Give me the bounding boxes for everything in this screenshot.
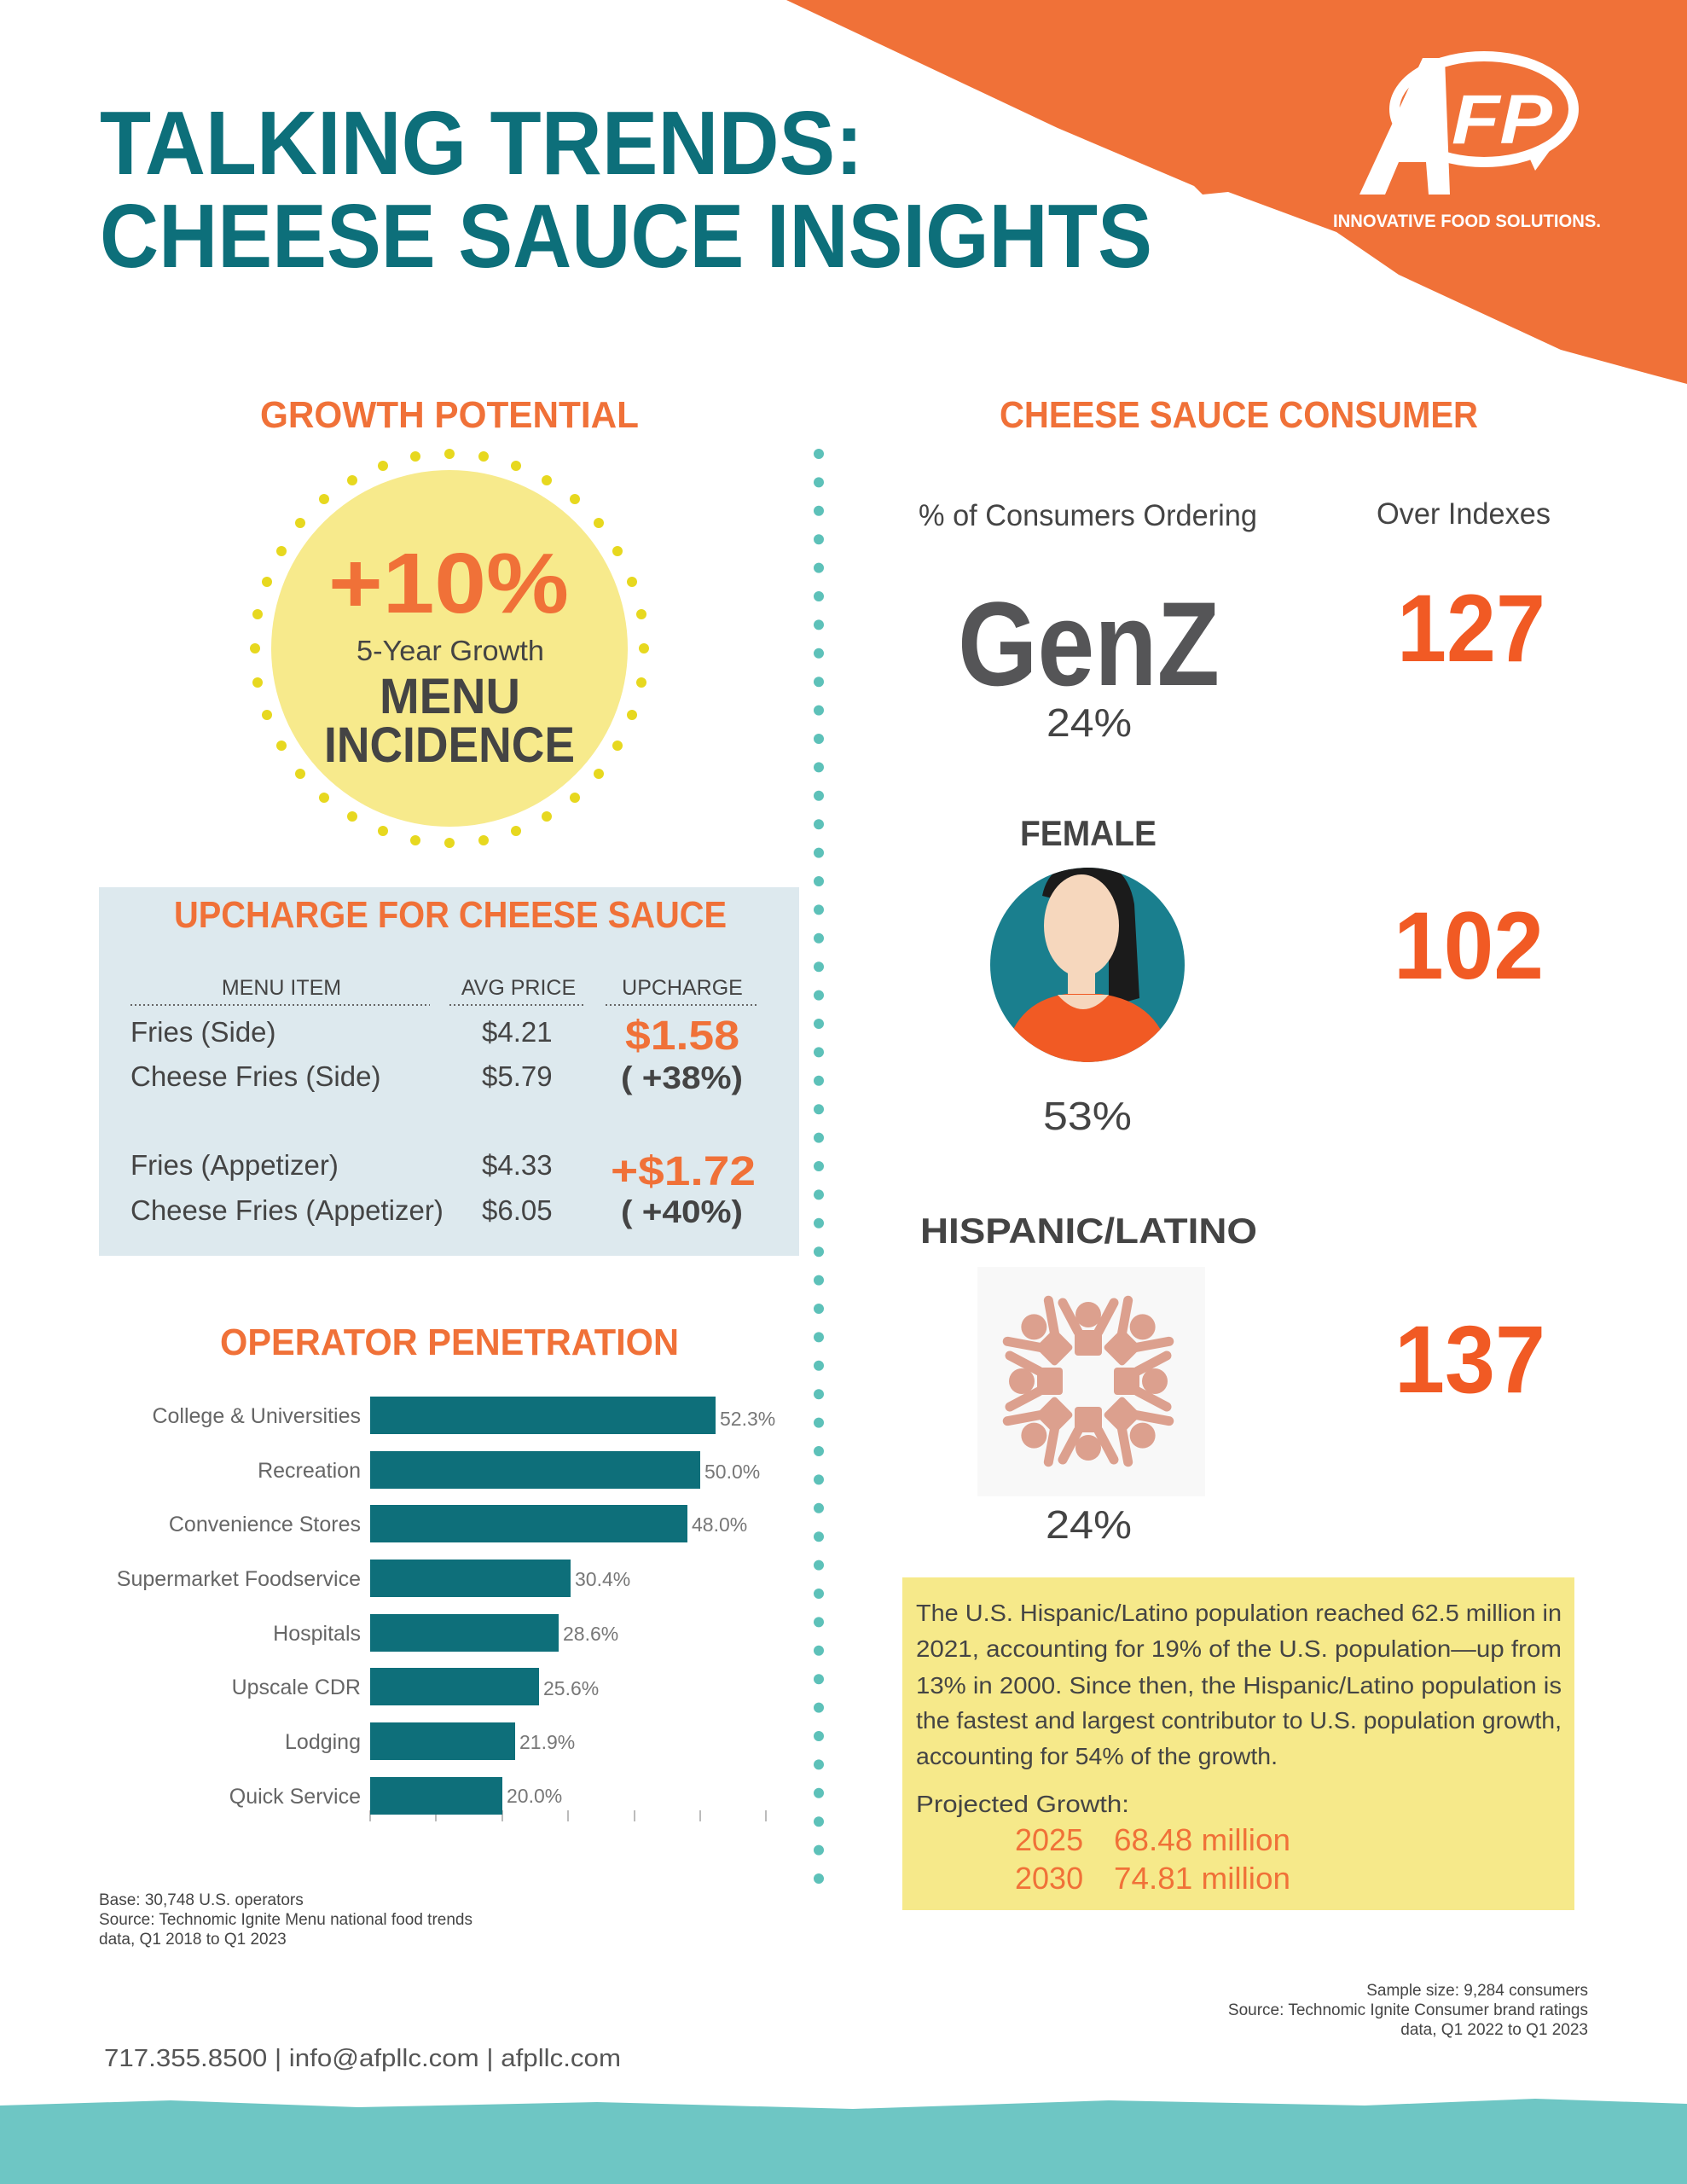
icon: woman bbox=[990, 860, 1185, 1075]
growth badge bbox=[250, 449, 649, 848]
female stat bbox=[990, 813, 1185, 1138]
footnote: consumer source: data, Q1 2022 to Q1 2023 bbox=[1400, 2021, 1588, 2039]
callout: hispanic population: 2021, accounting for 19% of the U.S. population—up from bbox=[916, 1635, 1562, 1662]
callout: hispanic population: 74.81 million bbox=[1114, 1861, 1290, 1896]
GenZ stat: GenZ bbox=[958, 577, 1220, 711]
footnote: operator source: data, Q1 2018 to Q1 2023 bbox=[99, 1931, 287, 1949]
panel: upcharge for cheese sauce: ( +40%) bbox=[621, 1194, 743, 1229]
dotted divider bbox=[814, 454, 824, 1907]
column headers: Over Indexes bbox=[1377, 497, 1551, 531]
callout: hispanic population: Projected Growth: bbox=[916, 1791, 1129, 1817]
index: 127: 127 bbox=[1397, 575, 1545, 682]
callout: hispanic population: the fastest and largest contributor to U.S. population growth, bbox=[916, 1707, 1562, 1734]
female stat: 53% bbox=[1043, 1094, 1132, 1138]
heading: operator penetration: OPERATOR PENETRATION bbox=[220, 1321, 679, 1363]
bar chart: operator penetration: 25.6% bbox=[543, 1677, 599, 1699]
panel: upcharge for cheese sauce: $6.05 bbox=[482, 1194, 553, 1226]
teal footer band bbox=[0, 2099, 1687, 2184]
bar chart: operator penetration: 28.6% bbox=[563, 1623, 618, 1645]
panel: upcharge for cheese sauce: Cheese Fries (Side) bbox=[130, 1060, 380, 1092]
heading: cheese sauce consumer: CHEESE SAUCE CONSUMER bbox=[1000, 394, 1478, 436]
panel: upcharge for cheese sauce: Fries (Side) bbox=[130, 1016, 276, 1048]
hispanic/latino stat bbox=[920, 1211, 1257, 1547]
callout: hispanic population bbox=[902, 1577, 1574, 1910]
footer contacts: 717.355.8500 | info@afpllc.com | afpllc.com bbox=[104, 2045, 621, 2072]
bar chart: operator penetration: Convenience Stores bbox=[169, 1513, 361, 1536]
panel: upcharge for cheese sauce: UPCHARGE FOR CHEESE SAUCE bbox=[174, 894, 727, 936]
index: 137: 137 bbox=[1394, 1306, 1545, 1413]
bar chart: operator penetration: 50.0% bbox=[704, 1461, 760, 1483]
callout: hispanic population: The U.S. Hispanic/Latino population reached 62.5 million in bbox=[916, 1600, 1562, 1626]
panel: upcharge for cheese sauce: $1.58 bbox=[625, 1014, 739, 1059]
hispanic/latino stat: 24% bbox=[1046, 1502, 1132, 1547]
growth badge: 5-Year Growth bbox=[357, 635, 544, 666]
GenZ stat: 24% bbox=[1046, 700, 1132, 745]
footnote: operator source: Source: Technomic Ignite Menu national food trends bbox=[99, 1911, 472, 1929]
panel: upcharge for cheese sauce: UPCHARGE bbox=[622, 976, 743, 1000]
column headers bbox=[919, 497, 1551, 532]
callout: hispanic population: 2025 bbox=[1015, 1822, 1083, 1857]
female stat: FEMALE bbox=[1020, 813, 1157, 853]
callout: hispanic population: 13% in 2000. Since then, the Hispanic/Latino population is bbox=[916, 1672, 1562, 1699]
bar chart: operator penetration: 21.9% bbox=[519, 1731, 575, 1753]
panel: upcharge for cheese sauce: +$1.72 bbox=[611, 1149, 756, 1194]
title bbox=[100, 93, 1152, 287]
bar chart: operator penetration: Lodging bbox=[285, 1730, 361, 1754]
footnote: operator source bbox=[99, 1891, 472, 1949]
panel: upcharge for cheese sauce: Cheese Fries (Appetizer) bbox=[130, 1194, 443, 1226]
bar chart: operator penetration: 20.0% bbox=[507, 1785, 562, 1807]
logo: AFP: FP bbox=[1452, 81, 1552, 159]
panel: upcharge for cheese sauce: AVG PRICE bbox=[461, 976, 576, 1000]
panel: upcharge for cheese sauce: ( +38%) bbox=[621, 1060, 743, 1095]
growth badge: MENU bbox=[380, 669, 520, 724]
footnote: operator source: Base: 30,748 U.S. operators bbox=[99, 1891, 304, 1909]
bar chart: operator penetration bbox=[117, 1397, 775, 1821]
heading: growth potential: GROWTH POTENTIAL bbox=[260, 394, 639, 436]
callout: hispanic population: accounting for 54% of the growth. bbox=[916, 1743, 1278, 1769]
bar chart: operator penetration: Quick Service bbox=[229, 1785, 361, 1809]
hispanic/latino stat: HISPANIC/LATINO bbox=[920, 1211, 1257, 1251]
growth badge: INCIDENCE bbox=[324, 717, 575, 773]
footnote: consumer source: Sample size: 9,284 consumers bbox=[1366, 1982, 1588, 2000]
icon: people circle bbox=[977, 1267, 1205, 1496]
logo tagline: INNOVATIVE FOOD SOLUTIONS. bbox=[1333, 212, 1601, 231]
footnote: consumer source bbox=[1228, 1982, 1588, 2039]
callout: hispanic population: 68.48 million bbox=[1114, 1822, 1290, 1857]
panel: upcharge for cheese sauce: $4.33 bbox=[482, 1149, 553, 1181]
title: CHEESE SAUCE INSIGHTS bbox=[100, 186, 1152, 287]
column headers: % of Consumers Ordering bbox=[919, 499, 1257, 532]
bar chart: operator penetration: 52.3% bbox=[720, 1408, 775, 1430]
bar chart: operator penetration: Recreation bbox=[258, 1459, 361, 1483]
bar chart: operator penetration: Supermarket Foodservice bbox=[117, 1567, 361, 1591]
orange corner background bbox=[786, 0, 1687, 384]
logo: AFP bbox=[1333, 56, 1601, 231]
bar chart: operator penetration: 48.0% bbox=[692, 1513, 747, 1536]
panel: upcharge for cheese sauce: $4.21 bbox=[482, 1016, 553, 1048]
title: TALKING TRENDS: bbox=[100, 93, 863, 194]
bar chart: operator penetration: 30.4% bbox=[575, 1568, 630, 1590]
index: 102: 102 bbox=[1394, 892, 1544, 999]
bar chart: operator penetration: Hospitals bbox=[273, 1622, 361, 1646]
panel: upcharge for cheese sauce: $5.79 bbox=[482, 1060, 553, 1092]
panel: upcharge for cheese sauce: MENU ITEM bbox=[222, 976, 341, 1000]
bar chart: operator penetration: Upscale CDR bbox=[232, 1676, 361, 1699]
bar chart: operator penetration: College & Universities bbox=[152, 1404, 361, 1428]
callout: hispanic population: 2030 bbox=[1015, 1861, 1083, 1896]
panel: upcharge for cheese sauce bbox=[99, 887, 799, 1256]
panel: upcharge for cheese sauce: Fries (Appetizer) bbox=[130, 1149, 339, 1181]
footnote: consumer source: Source: Technomic Ignite Consumer brand ratings bbox=[1228, 2001, 1588, 2019]
growth badge: +10% bbox=[328, 536, 569, 631]
